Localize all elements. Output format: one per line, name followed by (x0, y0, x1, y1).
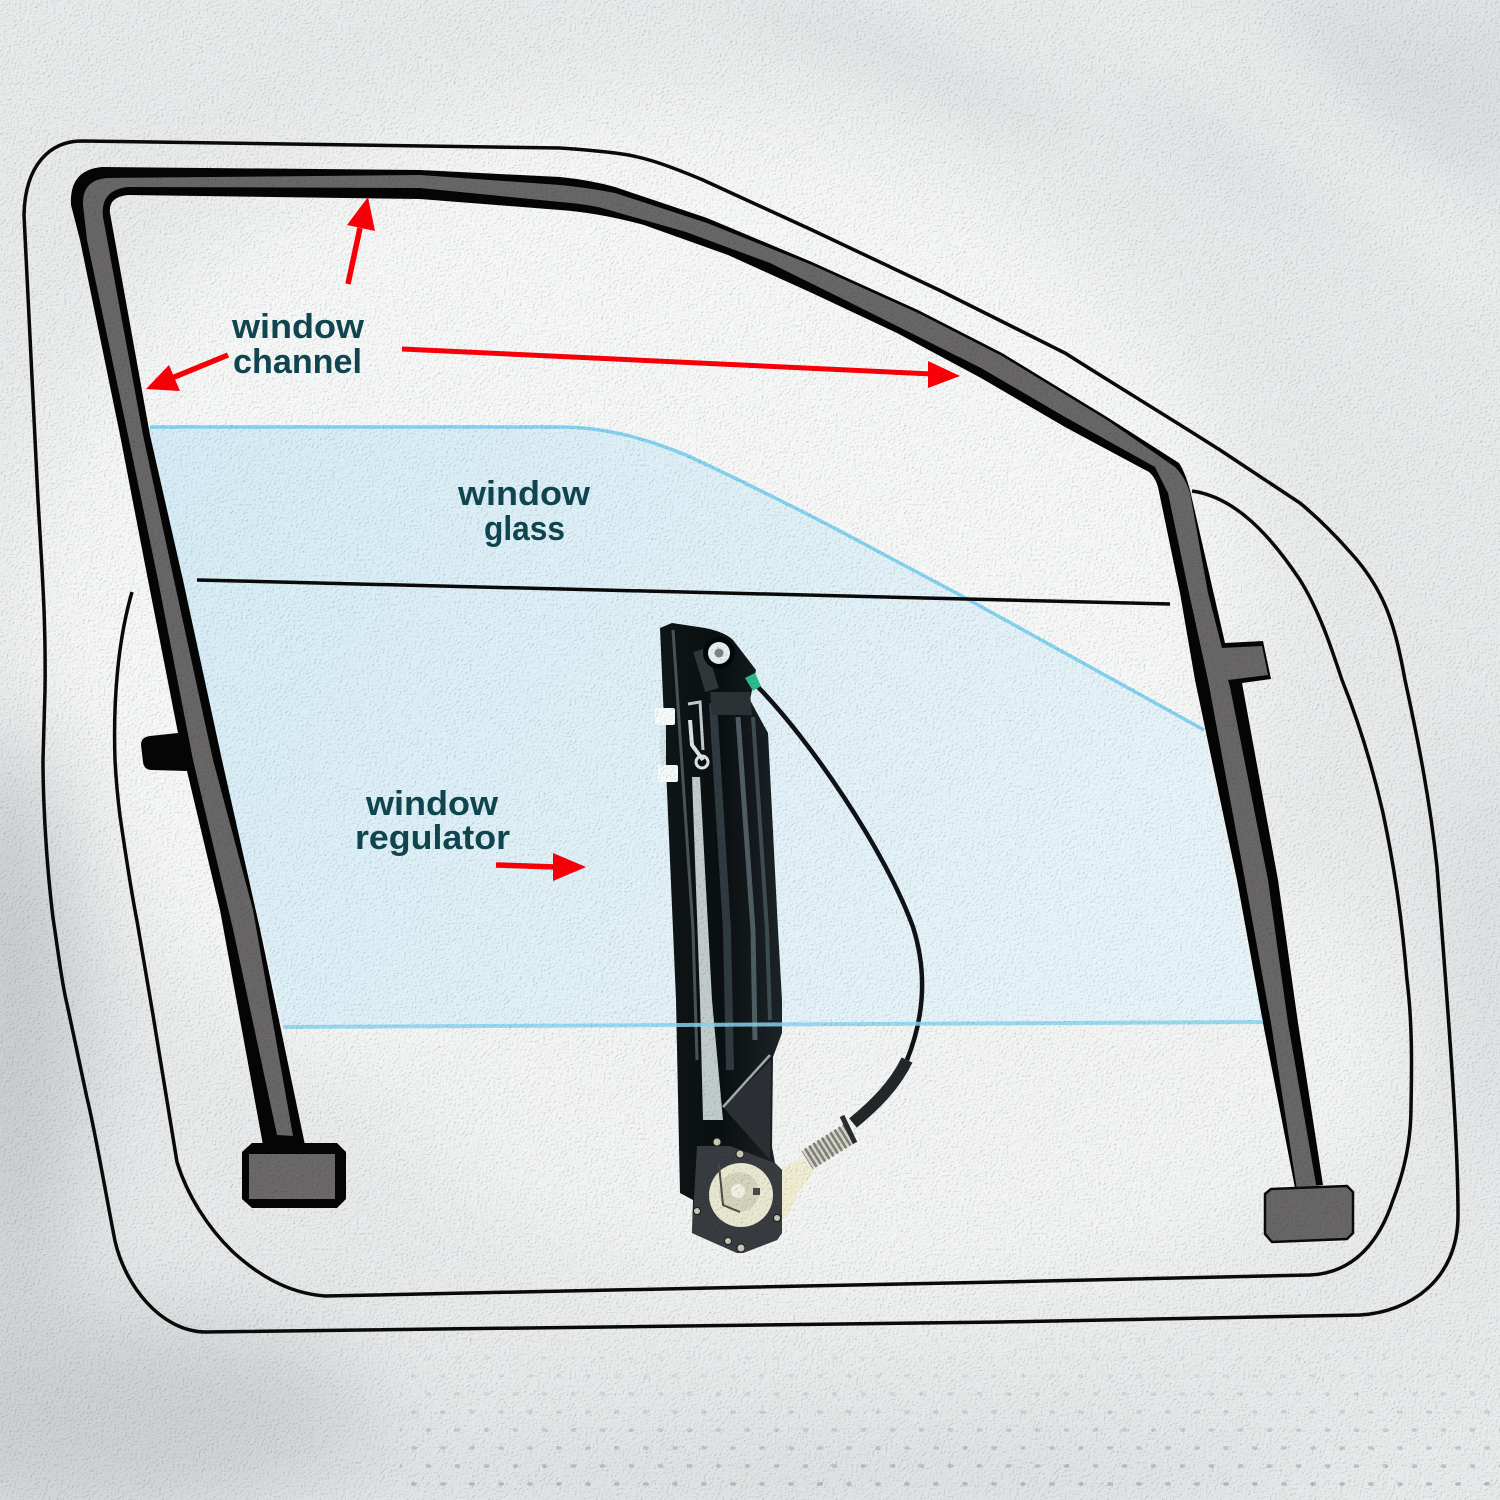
ivory drive gear (709, 1163, 773, 1227)
arrow: channel left (146, 355, 228, 391)
cable sleeve (853, 1060, 907, 1123)
ivory housing arm (779, 1158, 814, 1218)
motor plate (692, 1146, 782, 1253)
belt line (197, 580, 1170, 604)
regulator rail body (660, 623, 782, 1253)
white clips (655, 708, 678, 782)
rail ribs (673, 630, 770, 1070)
label: window glass: glass (484, 510, 565, 548)
label: window regulator: window (365, 785, 499, 823)
window regulator (655, 623, 922, 1253)
label: window glass (457, 475, 591, 548)
pulley (703, 637, 735, 669)
label: window channel: channel (233, 343, 362, 381)
right mounting block (1265, 1186, 1353, 1242)
glass bottom edge (283, 1022, 1263, 1027)
arrow: regulator (496, 853, 586, 881)
label: window channel (231, 308, 365, 381)
window glass pane (146, 427, 1263, 1027)
plate screws (694, 1138, 780, 1252)
outer door outline (24, 141, 1458, 1332)
lower folded panel (723, 1055, 771, 1160)
window channel (71, 167, 1353, 1242)
cable spring (807, 1116, 855, 1160)
carrier bracket (688, 702, 708, 768)
left mounting block (242, 1143, 346, 1208)
arrow: channel right (402, 349, 960, 388)
label: window glass: window (457, 475, 591, 513)
label: window channel: window (231, 308, 365, 346)
label: window regulator (355, 785, 510, 857)
arrow: channel top (347, 197, 375, 284)
silver slide strip (692, 777, 723, 1120)
green ferrule (745, 673, 761, 691)
label: window regulator: regulator (355, 819, 510, 857)
inner door outline (115, 491, 1412, 1296)
cable (757, 686, 922, 1060)
